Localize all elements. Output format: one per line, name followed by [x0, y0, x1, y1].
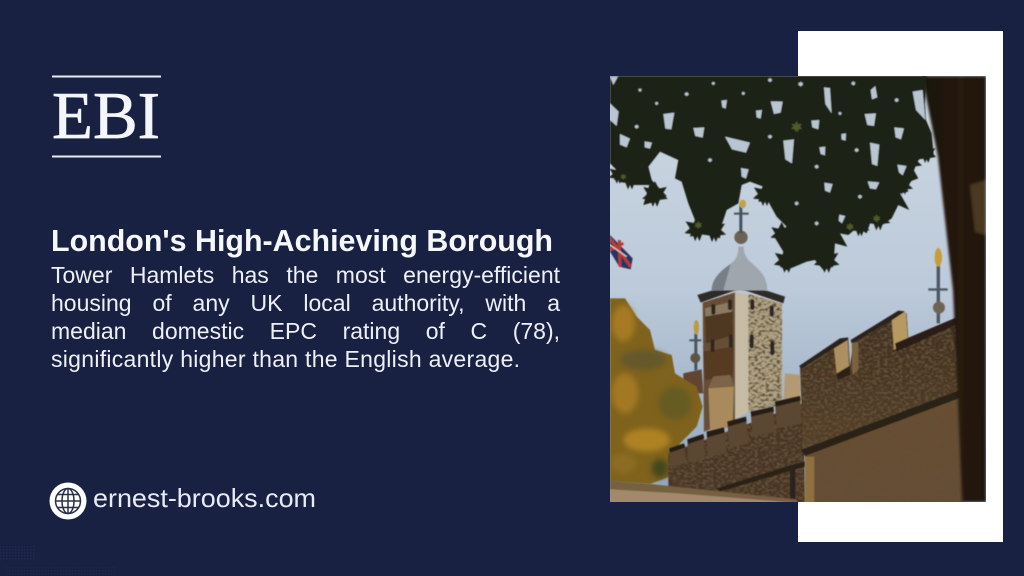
tower right face [748, 294, 782, 412]
edge leaves [609, 144, 936, 273]
sky gaps in canopy [610, 77, 925, 223]
stair turret [708, 386, 734, 430]
tower windows [711, 299, 774, 355]
stone ledge [801, 389, 962, 456]
body text: median domestic EPC rating of C (78), [51, 318, 560, 344]
white backing panel [798, 31, 1003, 542]
body text: Tower Hamlets has the most energy-efficient [51, 262, 560, 288]
foliage canopy [609, 76, 936, 273]
left lower curtain wall [668, 396, 805, 503]
front parapet wall [610, 480, 798, 502]
photo: Tower of London [609, 76, 986, 507]
logo: EBI: EBI [52, 79, 160, 153]
autumn tree [610, 298, 703, 484]
small rear turret [683, 369, 703, 393]
lower wall face [805, 397, 963, 507]
sky [610, 76, 986, 502]
right finial [928, 248, 948, 323]
faint dot texture [0, 546, 116, 576]
tower pale corner [735, 292, 748, 420]
body text: significantly higher than the English average. [51, 346, 520, 372]
website address: ernest-brooks.com [93, 483, 316, 513]
right high wall [799, 311, 963, 507]
tower left face [703, 292, 736, 432]
sunlit leaves [620, 121, 881, 231]
tower cornice [696, 290, 786, 304]
body text: housing of any UK local authority, with a [51, 290, 560, 316]
union flag [610, 235, 633, 269]
dome and spire [712, 200, 767, 291]
left finial [689, 320, 701, 371]
background tower and walls [683, 282, 801, 432]
tree trunk [922, 76, 986, 502]
icon: globe [50, 482, 86, 520]
heading: London's High-Achieving Borough [51, 223, 553, 258]
